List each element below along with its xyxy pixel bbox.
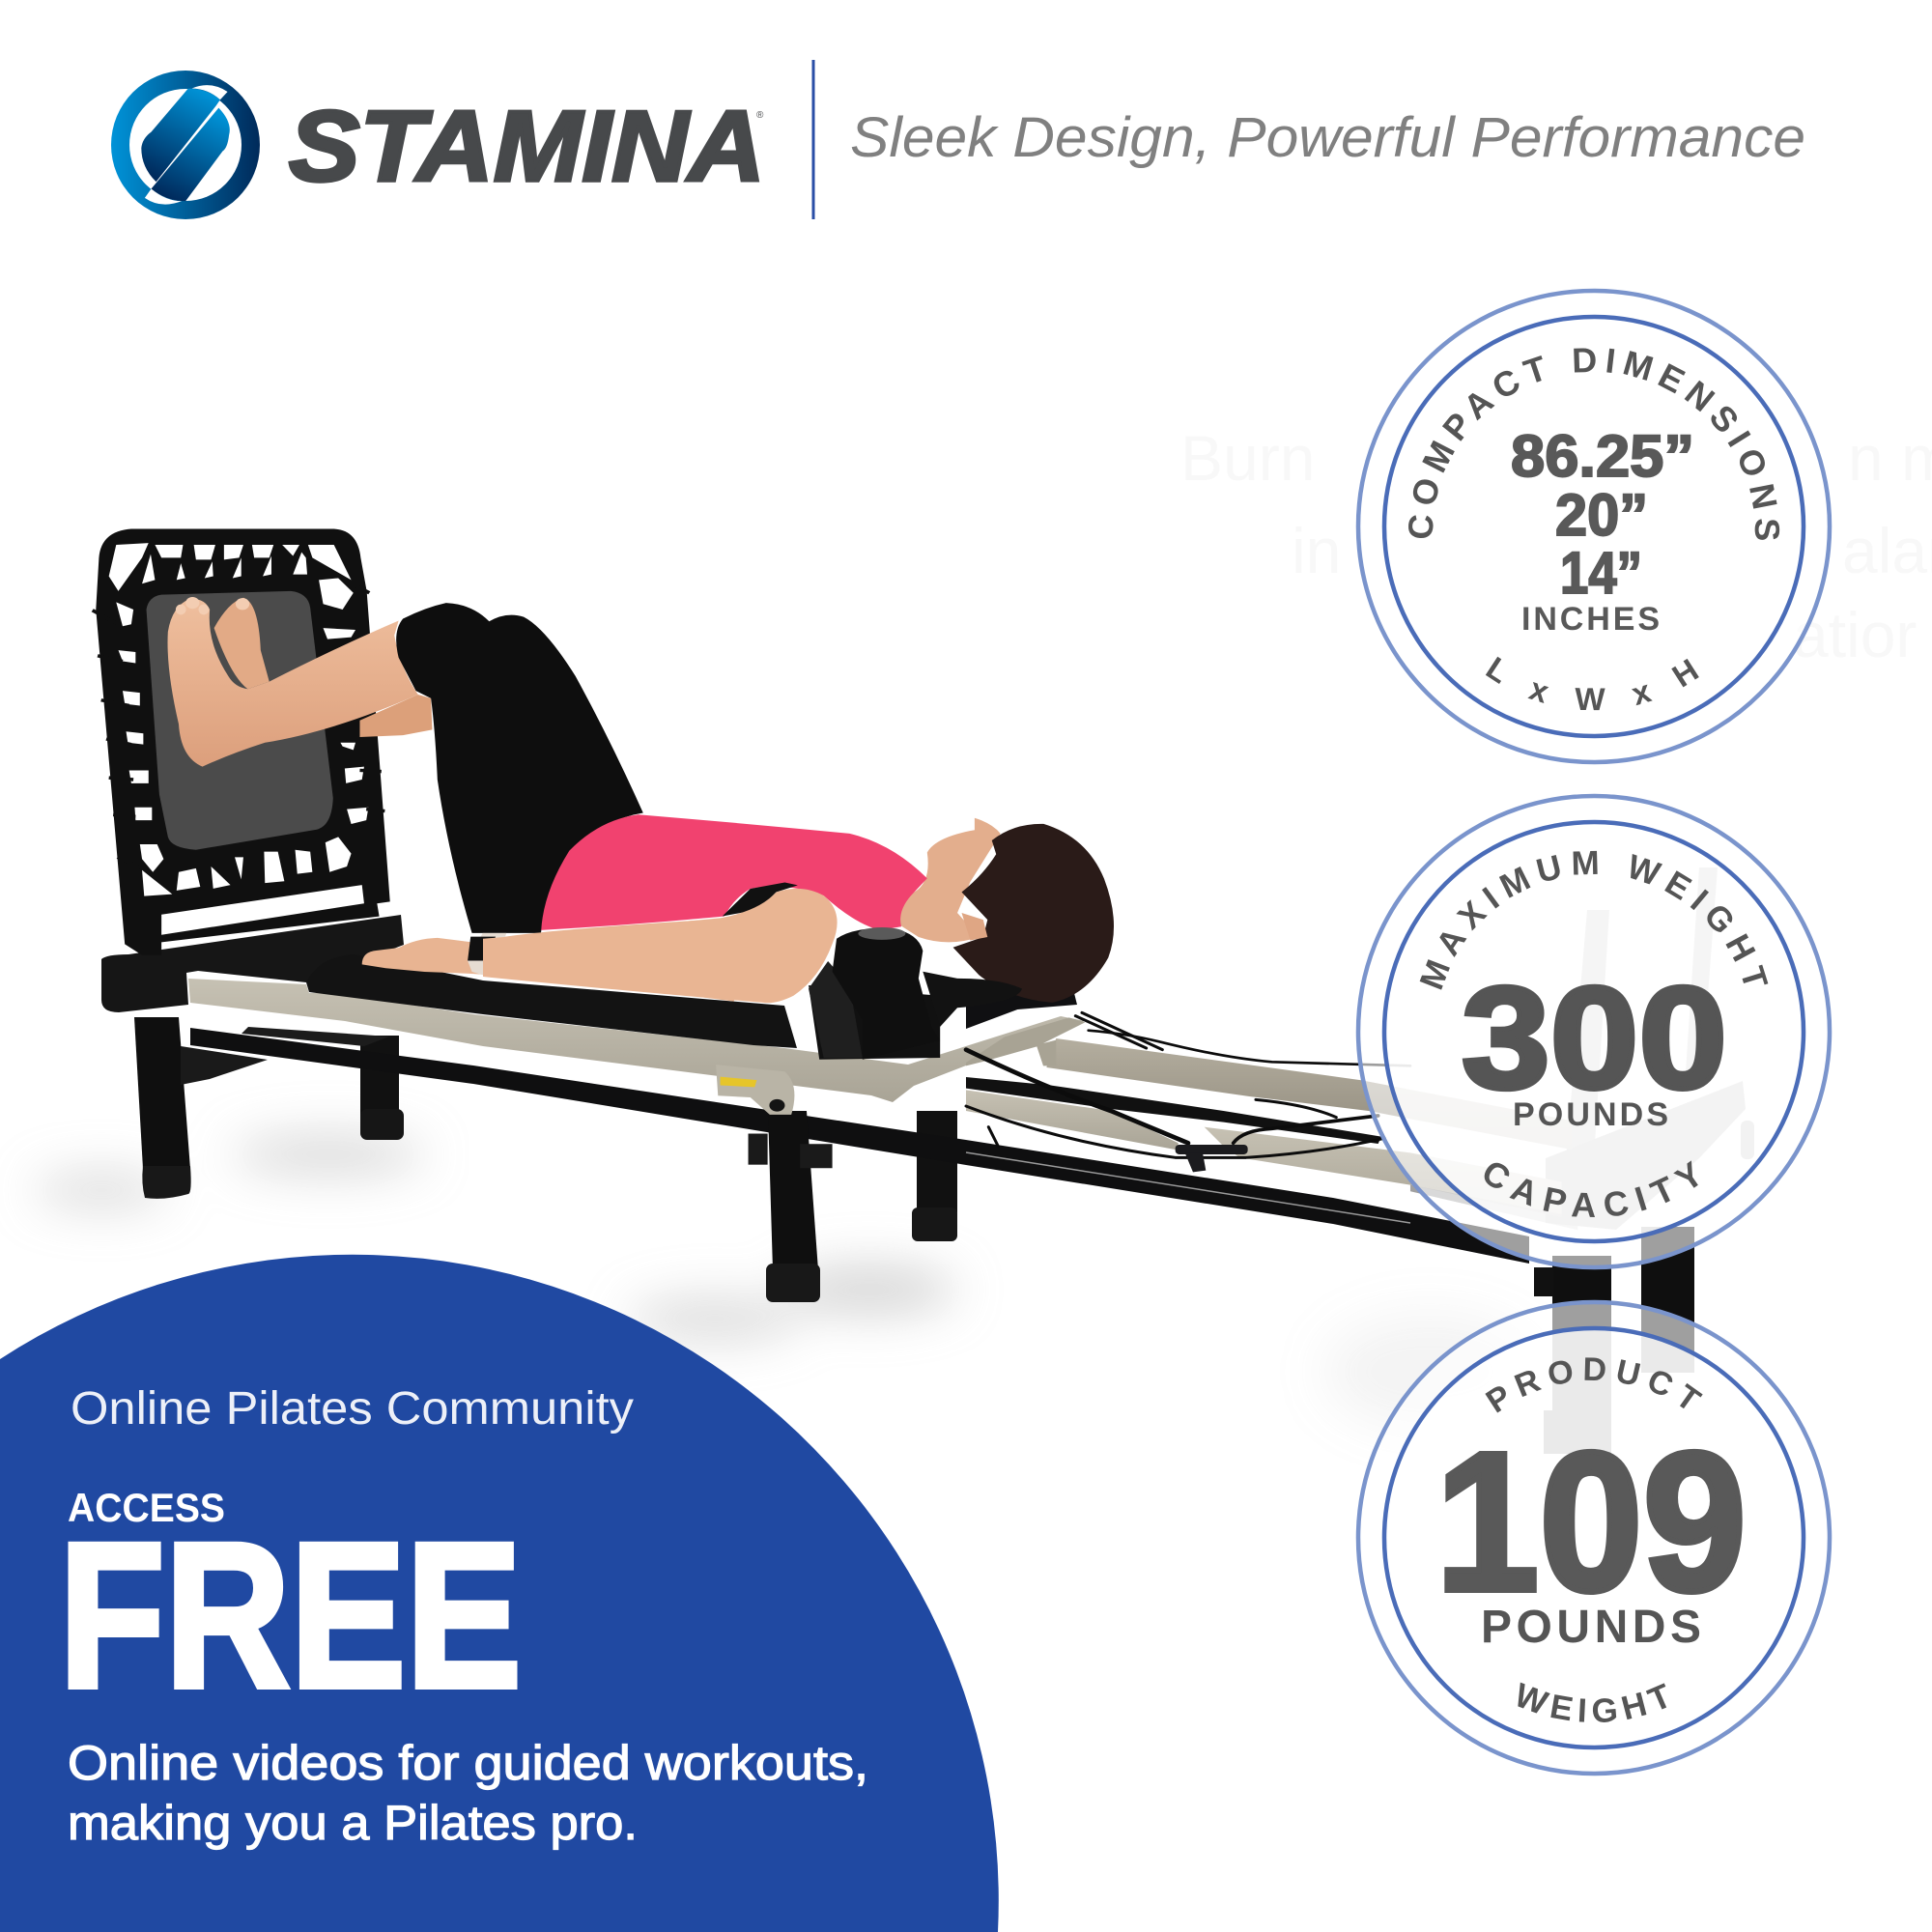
shoulder block — [833, 928, 940, 1060]
badge: compact dimensions — [1356, 288, 1832, 802]
far lower leg — [359, 695, 432, 737]
near foot and shin — [168, 599, 418, 767]
description — [68, 1736, 868, 1850]
reformer near legs — [134, 1017, 1694, 1454]
under-body dark block — [809, 985, 940, 1060]
rail end bracket — [966, 985, 1410, 1172]
dimensions: 14” — [1560, 540, 1642, 606]
head rest — [923, 972, 1022, 1027]
reformer far end ghosted behind badge — [1546, 867, 1754, 1230]
community heading: Online Pilates Community — [71, 1383, 634, 1435]
description: making you a Pilates pro. — [68, 1796, 638, 1850]
woman legs and feet — [168, 597, 734, 1002]
reformer main tube — [190, 1028, 1529, 1264]
floor shadows — [34, 1133, 1536, 1430]
badge: maximum weight capacity — [1320, 757, 1832, 1306]
dimensions: 20” — [1555, 482, 1648, 548]
free heading: FREE — [59, 1500, 522, 1731]
black leggings — [396, 603, 643, 933]
pounds: POUNDS — [1481, 1602, 1701, 1653]
pounds: POUNDS — [1513, 1096, 1668, 1133]
carriage bracket — [716, 1065, 794, 1115]
access label: ACCESS — [68, 1485, 225, 1530]
smartwatch — [468, 933, 506, 978]
dimensions — [1511, 423, 1694, 606]
inches: INCHES — [1521, 601, 1660, 638]
hand and forearm — [362, 919, 734, 1002]
curved capacity label: CAPACITY — [1484, 1161, 1698, 1217]
curved label: PRODUCT — [1486, 1357, 1703, 1412]
wordmark: STAMINA — [289, 91, 765, 203]
curved label: MAXIMUM WEIGHT — [1420, 850, 1768, 990]
footbar base block — [101, 915, 404, 1012]
reformer far legs — [360, 1036, 957, 1241]
arm — [483, 889, 838, 1003]
dimensions: 86.25” — [1511, 423, 1694, 489]
left leg brackets — [181, 1046, 268, 1085]
far and near rails with cross bar — [966, 1038, 1577, 1230]
description: Online videos for guided workouts, — [68, 1736, 868, 1790]
header: logo: ® — [756, 110, 764, 121]
curved label: COMPACT DIMENSIONS — [1408, 348, 1779, 540]
109 number: 109 — [1435, 1411, 1747, 1633]
illustration: reformer machine and woman — [93, 529, 1754, 1454]
leg hardware — [749, 1134, 833, 1168]
footbar rebounder frame and web — [93, 529, 390, 955]
faint background text: atior — [1793, 599, 1917, 670]
curved weight label: WEIGHT — [1518, 1683, 1667, 1722]
icon: stamina emblem — [111, 71, 260, 219]
header: logo — [111, 71, 765, 219]
divider — [811, 60, 815, 219]
curved axes label: L x W x H — [1486, 657, 1699, 711]
tagline: Sleek Design, Powerful Performance — [850, 106, 1805, 169]
carriage rail — [188, 979, 1085, 1102]
hair — [953, 824, 1114, 1003]
faint background text: in — [1292, 515, 1341, 586]
faint background text — [1180, 422, 1932, 670]
rebounder mat — [147, 591, 333, 850]
badge: product weight — [1356, 1300, 1832, 1776]
toes — [176, 597, 249, 614]
300 number: 300 — [1462, 956, 1727, 1119]
pink top — [541, 814, 927, 930]
neck and face — [895, 818, 1001, 942]
faint background text: Burn — [1180, 422, 1315, 494]
far foot — [214, 598, 270, 689]
panel: blue community shape — [0, 1255, 999, 1932]
woman torso and head — [483, 814, 1114, 1168]
carriage pad — [306, 954, 797, 1048]
strap — [809, 961, 863, 1058]
